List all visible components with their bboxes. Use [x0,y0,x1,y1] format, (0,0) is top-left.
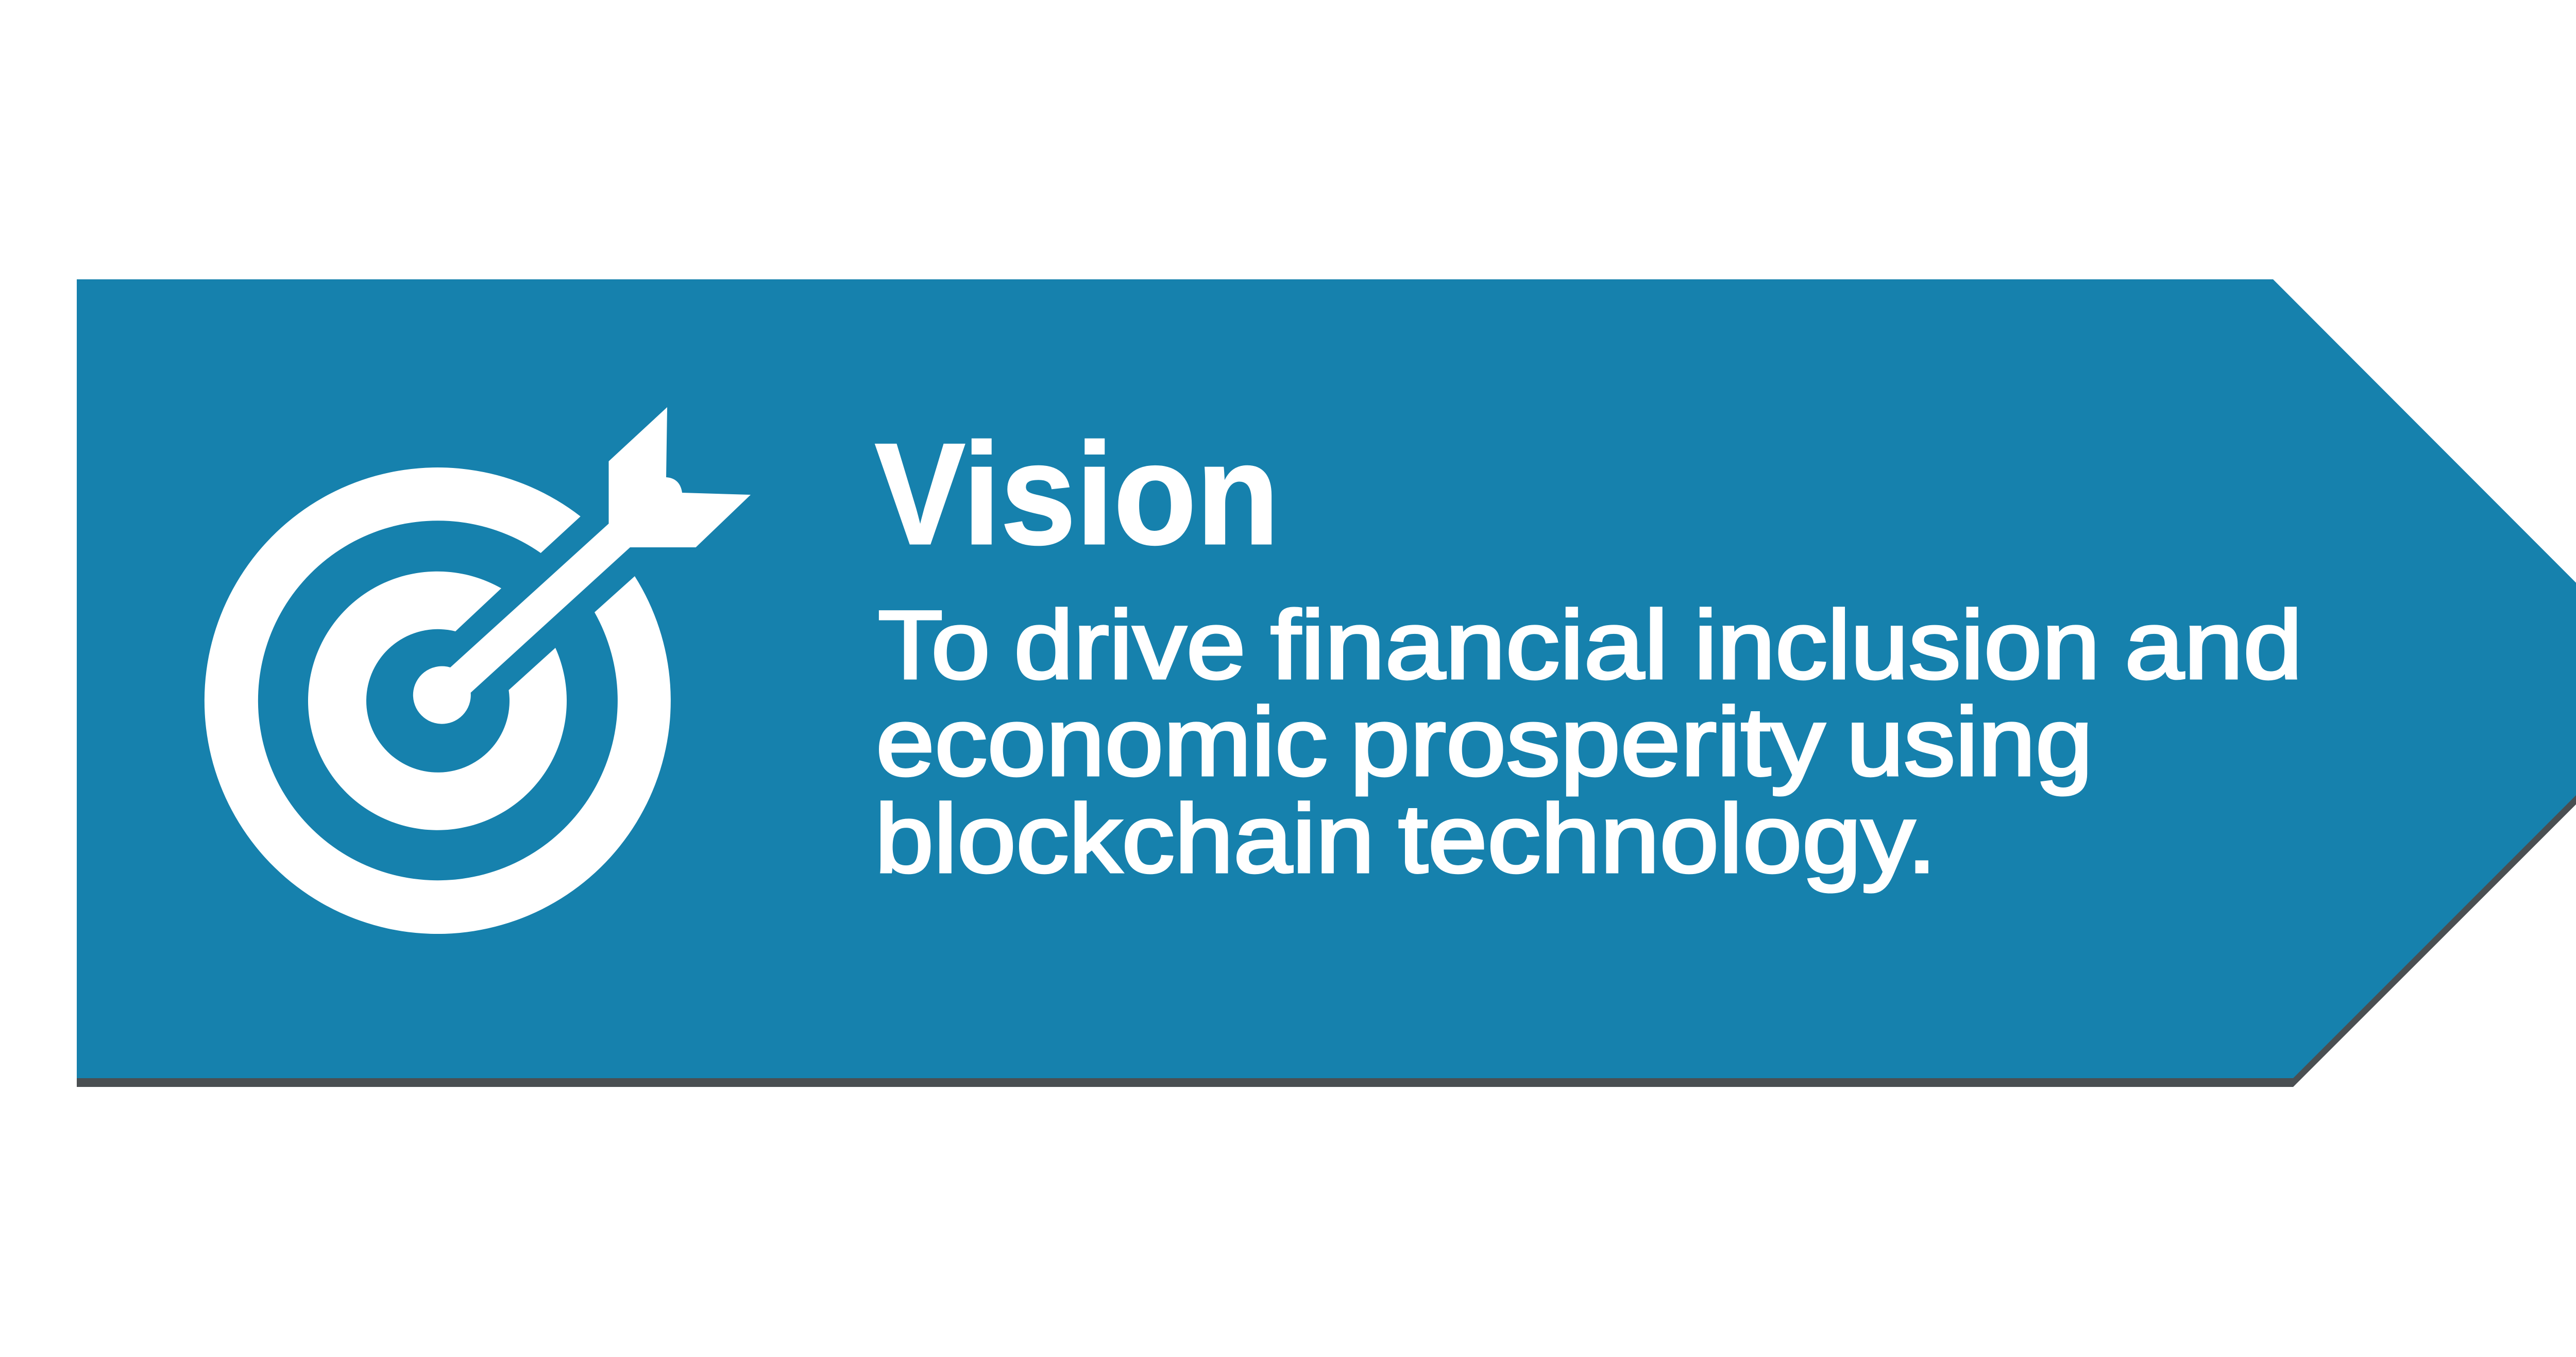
target middle ring [308,572,567,830]
text block: vision statement [875,591,2302,893]
line 3 [875,784,1937,893]
line 3: blockchain [875,784,1375,893]
arrow body [77,279,2576,1078]
icon: target with arrow [205,407,751,934]
line 1: To [878,591,990,699]
line 1: inclusion [1694,591,2100,699]
line 2: using [1846,688,2093,796]
line 1: drive [1014,591,1246,699]
line 2 [876,688,2093,796]
line 3: technology. [1398,784,1937,893]
line 1: and [2125,591,2302,699]
line 1: financial [1270,591,1668,699]
line 2: economic [876,688,1328,796]
target outer ring [205,467,671,934]
heading: Vision: Vision [875,414,1279,575]
line 1 [878,591,2302,699]
line 2: prosperity [1350,688,1825,796]
arrow shadow [77,288,2576,1087]
arrow stuck in bullseye [413,407,751,724]
panel: vision arrow banner [77,279,2576,1087]
